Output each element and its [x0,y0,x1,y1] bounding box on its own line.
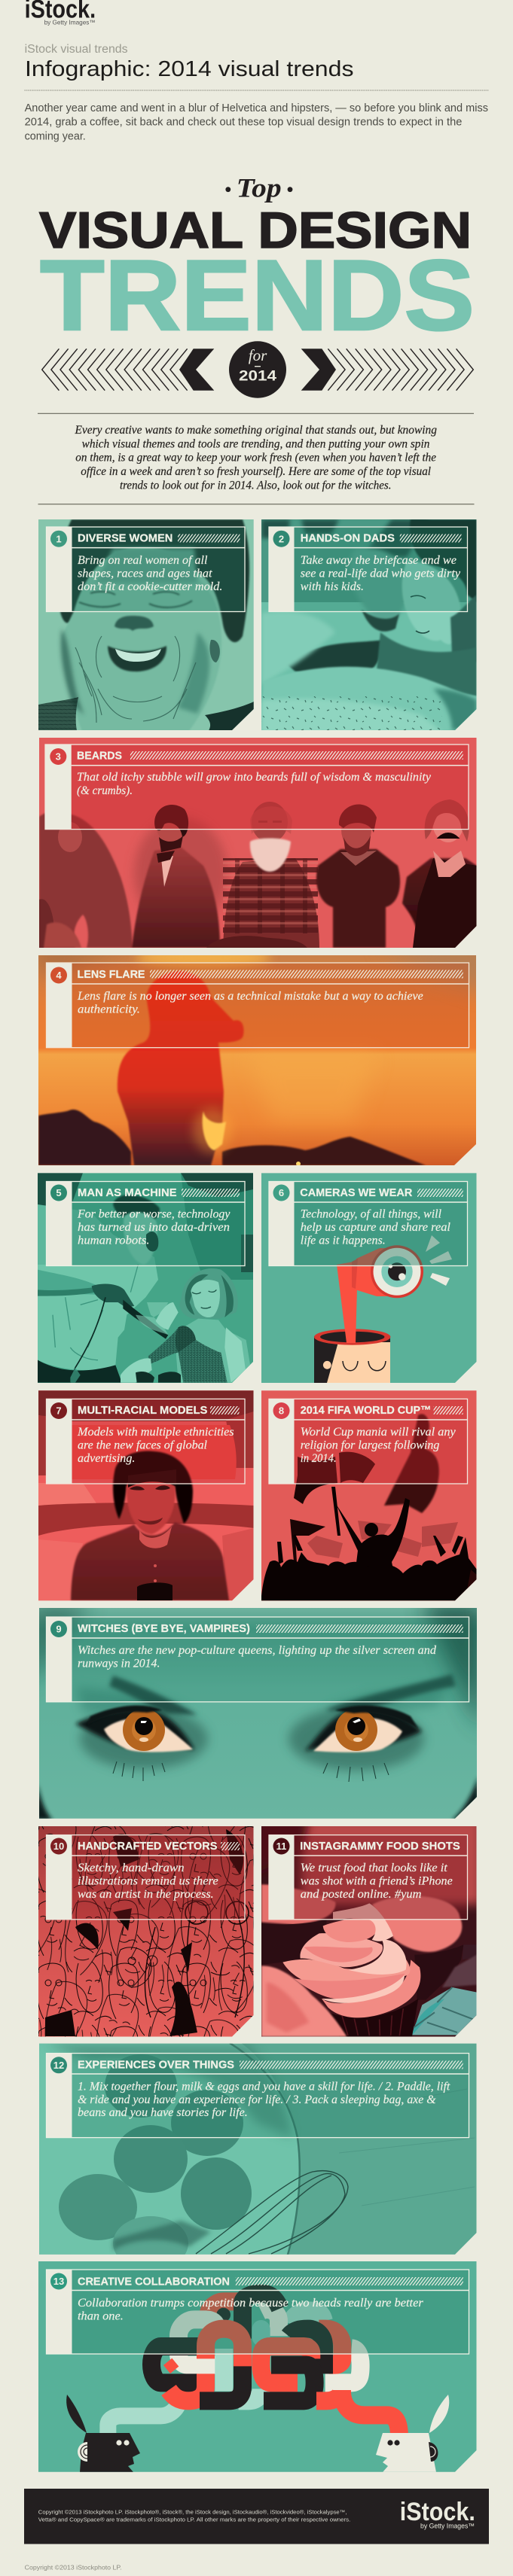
intro statement: on them, is a great way to keep your work fresh (even when you haven’t left the [75,452,436,464]
card: fifa world cup: religion for largest following [301,1439,439,1451]
intro paragraph: coming year. [25,130,86,142]
intro paragraph [25,102,488,142]
icon: right head [376,2395,449,2472]
card: diverse women: Bring on real women of all [78,554,208,567]
card: experiences over things: & ride and you have an experience for life. / 3. Pack a sleeping bag, axe & [78,2093,436,2106]
card: lens flare: LENS FLARE [77,968,145,981]
panel 10: handcrafted vectors [38,1826,254,2037]
card: handcrafted vectors: illustrations remind us there [78,1874,218,1888]
card: instagrammy food shots: INSTAGRAMMY FOOD SHOTS [300,1840,460,1853]
card: creative collaboration: than one. [78,2310,124,2323]
card: multi-racial models: MULTI-RACIAL MODELS [78,1404,207,1417]
panel 1: diverse women [38,519,254,738]
card: diverse women: shapes, races and ages that [78,568,212,580]
illustration: periscope head [314,1235,452,1383]
logo: iStock by Getty Images: by Getty Images™ [44,18,96,26]
card: fifa world cup: World Cup mania will rival any [301,1426,457,1439]
card: multi-racial models: 7 [56,1405,62,1417]
photo detail: lower scene [38,1265,253,1383]
card: experiences over things: EXPERIENCES OVER THINGS [78,2059,234,2072]
card: lens flare: Lens flare is no longer seen as a technical mistake but a way to achieve [77,990,423,1003]
card: diverse women [47,527,245,611]
copyright line: Copyright ©2013 iStockphoto LP. [25,2565,122,2571]
intro statement: trends to look out for in 2014. Also, look out for the witches. [120,479,392,492]
card: cameras we wear: life as it happens. [301,1235,386,1247]
card: man as machine: human robots. [78,1235,149,1247]
card: lens flare: authenticity. [78,1003,140,1016]
card: hands-on dads [269,527,467,611]
panel 12: experiences over things [39,2043,477,2270]
card: experiences over things: 12 [53,2060,64,2071]
poster title: Top Visual Design Trends: TRENDS [40,240,475,352]
card: lens flare: 4 [56,970,62,981]
card: witches [47,1617,469,1702]
card: handcrafted vectors: HANDCRAFTED VECTORS [78,1840,217,1853]
intro paragraph: Another year came and went in a blur of Helvetica and hipsters, — so before you blink and miss [25,102,488,114]
card: fifa world cup: 8 [279,1405,284,1417]
card: man as machine: For better or worse, technology [77,1207,231,1221]
panel 3: beards [39,738,477,948]
panel 4: lens flare [30,945,490,1166]
footer bar [24,2489,489,2544]
card: lens flare [47,963,469,1048]
card: creative collaboration: CREATIVE COLLABORATION [78,2275,230,2288]
page header: kicker and title: Infographic: 2014 visual trends [25,57,353,81]
card: experiences over things [47,2054,469,2138]
panel 8: 2014 fifa world cup [261,1390,477,1603]
card: cameras we wear [269,1182,467,1266]
card: hands-on dads: 2 [279,533,284,544]
card: witches: runways in 2014. [78,1658,160,1670]
footer bar: iStock. [400,2498,475,2526]
card: beards [45,744,469,830]
card: hands-on dads: see a real-life dad who gets dirty [301,568,461,580]
card: cameras we wear: 6 [279,1187,284,1198]
footer bar: by Getty Images™ [420,2522,475,2529]
panel 5: man as machine [38,1173,253,1384]
footer bar: Vetta® and CopySpace® are trademarks of iStockphoto LP. All other marks are the property of their respective owners. [38,2516,350,2523]
panel 9: witches [30,1603,482,1820]
panel 11: instagrammy food shots [256,1818,482,2037]
card: diverse women: don’t fit a cookie-cutter mold. [78,580,222,593]
card: creative collaboration: 13 [53,2276,64,2287]
card: creative collaboration [47,2270,469,2354]
chevron banner with for 2014 badge: for [249,346,267,364]
card: handcrafted vectors: Sketchy, hand-drawn [78,1862,185,1874]
page header: kicker and title [25,43,353,81]
poster title: Top Visual Design Trends [39,173,475,352]
intro statement [75,424,437,492]
card: fifa world cup: in 2014. [301,1452,337,1465]
card: beards: 3 [56,751,61,763]
card: man as machine: has turned us into data-driven [78,1221,230,1234]
card: cameras we wear: help us capture and share real [301,1221,451,1234]
poster title: Top Visual Design Trends: Top [237,173,282,203]
intro statement: office in a week and aren’t so fresh yourself). Here are some of the top visual [81,465,431,478]
card: witches: WITCHES (BYE BYE, VAMPIRES) [78,1622,250,1635]
card: diverse women: DIVERSE WOMEN [78,531,173,545]
footer bar: Copyright ©2013 iStockphoto LP. iStockphoto®, iStock®, the iStock design, iStockaudio®, iStockvideo®, iStockalypse™, [38,2508,347,2516]
page header: kicker and title: iStock visual trends [25,43,128,56]
intro paragraph: 2014, grab a coffee, sit back and check out these top visual design trends to expect in the [25,117,462,129]
card: fifa world cup [269,1399,467,1484]
card: handcrafted vectors: 10 [53,1841,64,1852]
illustration: tangled minds [108,2294,399,2437]
card: hands-on dads: HANDS-ON DADS [301,531,395,545]
card: man as machine: MAN AS MACHINE [78,1186,177,1199]
intro statement: Every creative wants to make something original that stands out, but knowing [75,424,437,437]
card: instagrammy food shots: was shot with a friend’s iPhone [301,1874,453,1888]
card: creative collaboration: Collaboration trumps competition because two heads really are better [78,2297,423,2310]
card: man as machine: 5 [56,1187,62,1198]
card: multi-racial models: Models with multiple ethnicities [77,1426,234,1439]
card: instagrammy food shots: 11 [276,1841,286,1852]
card: cameras we wear: Technology, of all things, will [301,1207,442,1221]
card: handcrafted vectors: was an artist in the process. [78,1888,214,1901]
card: cameras we wear: CAMERAS WE WEAR [300,1186,412,1199]
panel 6: cameras we wear [261,1173,477,1384]
card: multi-racial models: are the new faces of global [78,1439,208,1451]
chevron banner with for 2014 badge: 2014 [239,369,276,384]
card: experiences over things: 1. Mix together flour, milk & eggs and you have a skill for life. / 2. Paddle, lift [78,2081,450,2093]
card: witches: Witches are the new pop-culture queens, lighting up the silver screen and [78,1644,437,1657]
panel 7: multi-racial models [38,1390,254,1601]
card: instagrammy food shots: and posted online. #yum [301,1888,422,1901]
card: man as machine [47,1182,245,1266]
card: handcrafted vectors [47,1835,245,1920]
card: fifa world cup: 2014 FIFA WORLD CUP™ [301,1404,431,1417]
intro statement: which visual themes and tools are trending, and then putting your own spin [82,437,430,450]
card: experiences over things: beans and you have stories for life. [78,2106,248,2119]
poster title: Top Visual Design Trends: VISUAL DESIGN [39,202,472,259]
card: diverse women: 1 [56,533,62,544]
card: beards: (& crumbs). [77,784,133,797]
card: instagrammy food shots: We trust food that looks like it [301,1862,447,1874]
icon: left head [66,2395,140,2472]
panel 2: hands-on dads [261,519,477,734]
card: hands-on dads: with his kids. [301,580,364,593]
card: beards: That old itchy stubble will grow into beards full of wisdom & masculinity [77,771,432,784]
panel 13: creative collaboration [38,2261,477,2472]
chevron banner with for 2014 badge [42,341,473,398]
photo detail: cupcake [261,1884,477,2036]
card: multi-racial models [47,1399,245,1484]
card: multi-racial models: advertising. [78,1452,135,1465]
card: witches: 9 [56,1624,62,1635]
card: beards: BEARDS [77,750,122,763]
card: instagrammy food shots [269,1835,467,1920]
card: hands-on dads: Take away the briefcase and we [301,554,457,567]
